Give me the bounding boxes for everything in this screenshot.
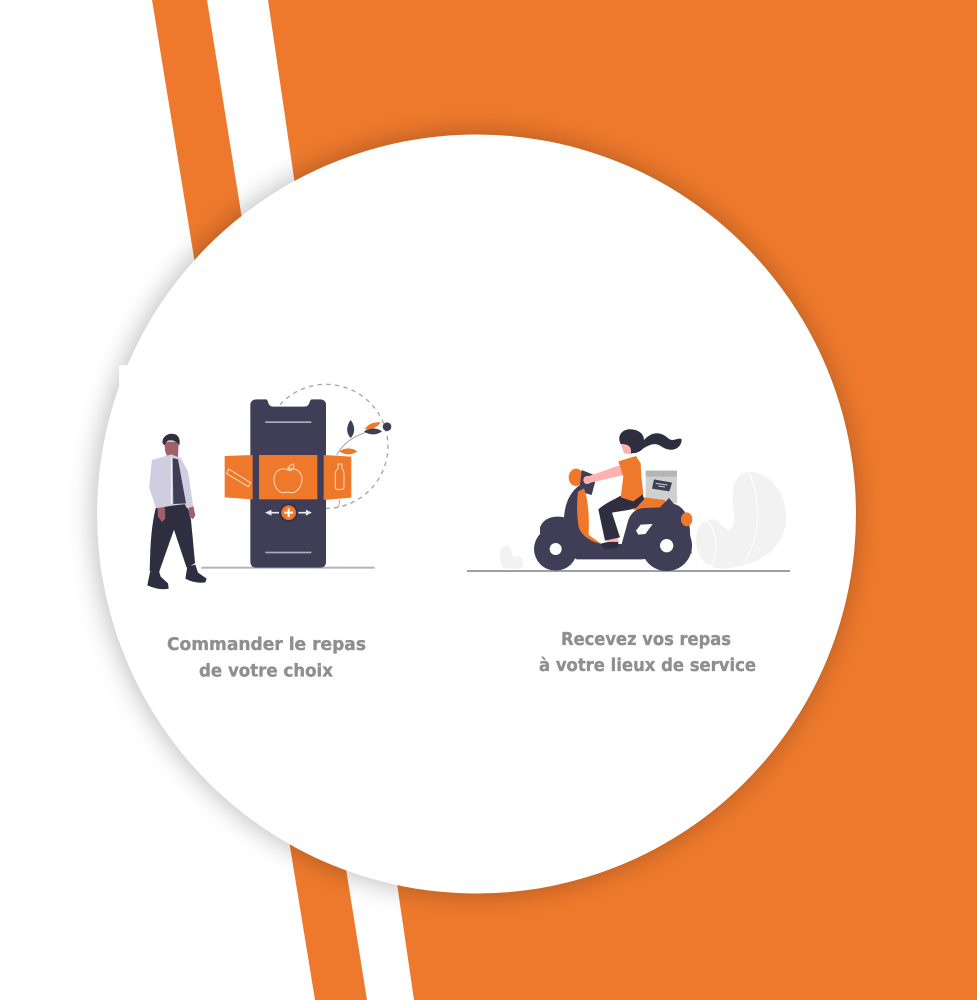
caption: order step — [167, 635, 366, 682]
dashed orbit — [280, 384, 388, 508]
plant — [337, 420, 391, 508]
scooter seat and headlamp — [569, 469, 665, 510]
caption: order step: Commander le repas — [167, 635, 366, 655]
caption: order step: de votre choix — [199, 662, 334, 682]
scooter body — [534, 470, 692, 571]
circle shadow — [94, 133, 856, 895]
phone — [250, 399, 326, 568]
panel: left tab with snack bar — [225, 455, 253, 499]
illustration: person and phone — [147, 384, 391, 589]
plus control — [267, 503, 310, 522]
delivery box — [646, 471, 677, 503]
ground line — [201, 567, 375, 569]
caption: delivery step: Recevez vos repas — [561, 630, 731, 650]
person — [147, 434, 207, 589]
illustration: delivery scooter — [467, 429, 790, 572]
background leaves — [500, 472, 786, 569]
panel: right tab with bottle — [324, 455, 351, 500]
rider — [583, 429, 682, 549]
white circle panel — [97, 134, 856, 894]
panel: centre with apple — [259, 455, 317, 499]
scooter orange shield and tail light — [577, 488, 692, 544]
caption: delivery step — [539, 630, 756, 676]
background: orange field — [268, 0, 977, 1000]
ground line — [467, 570, 790, 572]
caption: delivery step: à votre lieux de service — [539, 656, 756, 676]
background: orange stripe — [152, 0, 367, 1000]
